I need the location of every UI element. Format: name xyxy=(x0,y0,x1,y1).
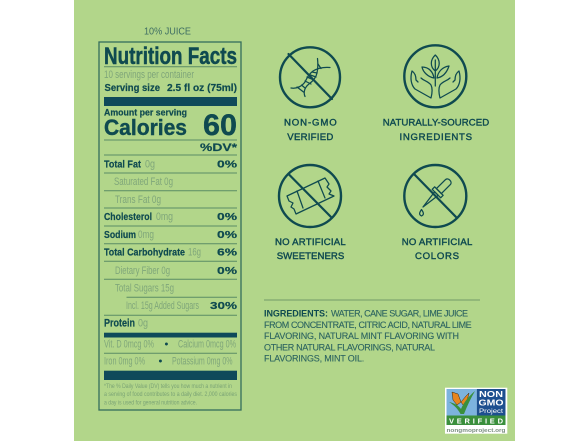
icon: plant in hands xyxy=(404,45,466,107)
label: naturally-sourced ingredients: NATURALLY-SOURCED xyxy=(383,118,489,129)
calories label: Calories xyxy=(104,115,187,140)
row: sodium: 0% xyxy=(217,229,238,241)
serving size: 2.5 fl oz (75ml) xyxy=(167,82,237,94)
ingredients text block: WATER, CANE SUGAR, LIME JUICE xyxy=(331,309,468,319)
footnote xyxy=(104,383,238,406)
nutrition facts title: Nutrition Facts xyxy=(104,43,237,70)
logo: NON GMO Project text: NON xyxy=(479,389,503,399)
label: non-GMO verified xyxy=(284,118,337,143)
label: naturally-sourced ingredients xyxy=(383,118,489,143)
footnote: a serving of food contributes to a daily diet. 2,000 calories xyxy=(104,391,238,398)
row: total fat: Total Fat xyxy=(104,158,141,170)
row: total carbohydrate: 16g xyxy=(188,247,201,259)
micronutrients row 1: • xyxy=(164,338,168,350)
logo: NON GMO Project text: GMO xyxy=(478,398,504,408)
row: added sugars: Incl. 15g Added Sugars xyxy=(126,300,199,312)
logo: url: nongmoproject.org xyxy=(446,428,506,434)
row: sodium: Sodium xyxy=(104,229,136,241)
row: cholesterol: 0% xyxy=(217,211,238,223)
logo: butterfly xyxy=(452,392,469,405)
icon: non-GMO DNA xyxy=(280,47,340,107)
label: no artificial colors: NO ARTIFICIAL xyxy=(402,237,473,248)
row: saturated fat: Saturated Fat 0g xyxy=(114,176,173,188)
ingredients text block: FROM CONCENTRATE, CITRIC ACID, NATURAL LIME xyxy=(264,320,472,330)
ingredients text block: OTHER NATURAL FLAVORINGS, NATURAL xyxy=(264,342,435,352)
heading: 10% juice: 10% JUICE xyxy=(144,26,191,38)
logo: non-GMO project verified xyxy=(445,388,507,434)
label: no artificial sweeteners xyxy=(275,237,346,262)
ingredients text block: FLAVORINGS, MINT OIL. xyxy=(264,354,364,364)
label: no artificial sweeteners: NO ARTIFICIAL xyxy=(275,237,346,248)
row: sodium xyxy=(104,229,238,241)
green background panel xyxy=(74,0,515,441)
row: total carbohydrate: Total Carbohydrate xyxy=(104,247,185,259)
row: cholesterol: 0mg xyxy=(156,211,173,223)
row: dietary fiber: 0% xyxy=(217,265,238,277)
micronutrients row 1: Vit. D 0mcg 0% xyxy=(104,338,154,350)
micronutrients row 2: Potassium 0mg 0% xyxy=(172,356,233,368)
micronutrients row 2: Iron 0mg 0% xyxy=(104,356,145,368)
serving size xyxy=(104,82,237,94)
calories value: 60 xyxy=(203,109,237,142)
footnote: a day is used for general nutrition advice. xyxy=(104,399,197,406)
icon: no sweeteners packet xyxy=(279,165,341,227)
label: no artificial colors xyxy=(402,237,473,262)
row: total fat: 0% xyxy=(217,158,238,170)
row: sodium: 0mg xyxy=(138,229,154,241)
label: non-GMO verified: VERIFIED xyxy=(287,132,333,143)
row: protein: Protein xyxy=(104,318,135,330)
panel: nutrition facts label xyxy=(99,42,241,410)
logo: checkmark xyxy=(449,391,475,414)
ingredients text block: FLAVORING, NATURAL MINT FLAVORING WITH xyxy=(264,331,459,341)
logo: NON GMO Project text xyxy=(478,389,504,415)
label: no artificial colors: COLORS xyxy=(415,251,459,262)
amount per serving: Amount per serving xyxy=(104,108,187,118)
logo: verified band text: VERIFIED xyxy=(449,416,504,426)
row: cholesterol: Cholesterol xyxy=(104,211,152,223)
row: added sugars: 30% xyxy=(210,300,238,312)
row: trans fat: Trans Fat 0g xyxy=(115,194,161,206)
row: dietary fiber xyxy=(115,265,238,277)
footnote: *The % Daily Value (DV) tells you how much a nutrient in xyxy=(104,383,232,390)
ingredients text block xyxy=(264,309,472,364)
ingredients text block: INGREDIENTS: xyxy=(264,309,328,319)
row: protein: 0g xyxy=(138,318,148,330)
label: non-GMO verified: NON-GMO xyxy=(284,118,337,129)
label: no artificial sweeteners: SWEETENERS xyxy=(277,251,344,262)
row: cholesterol xyxy=(104,211,238,223)
logo: NON GMO Project text: Project xyxy=(479,408,503,415)
icon: no colors dropper xyxy=(404,165,466,227)
row: total fat xyxy=(104,158,238,170)
percent daily value header: %DV* xyxy=(200,142,238,154)
row: dietary fiber: Dietary Fiber 0g xyxy=(115,265,170,277)
servings per container: 10 servings per container xyxy=(104,69,194,81)
micronutrients row 1: Calcium 0mcg 0% xyxy=(178,338,236,350)
serving size: Serving size xyxy=(104,82,160,94)
row: total sugars: Total Sugars 15g xyxy=(115,283,174,295)
row: total fat: 0g xyxy=(145,158,155,170)
micronutrients row 2: • xyxy=(158,356,162,368)
label: naturally-sourced ingredients: INGREDIENTS xyxy=(400,132,472,143)
row: total carbohydrate: 6% xyxy=(217,247,238,259)
